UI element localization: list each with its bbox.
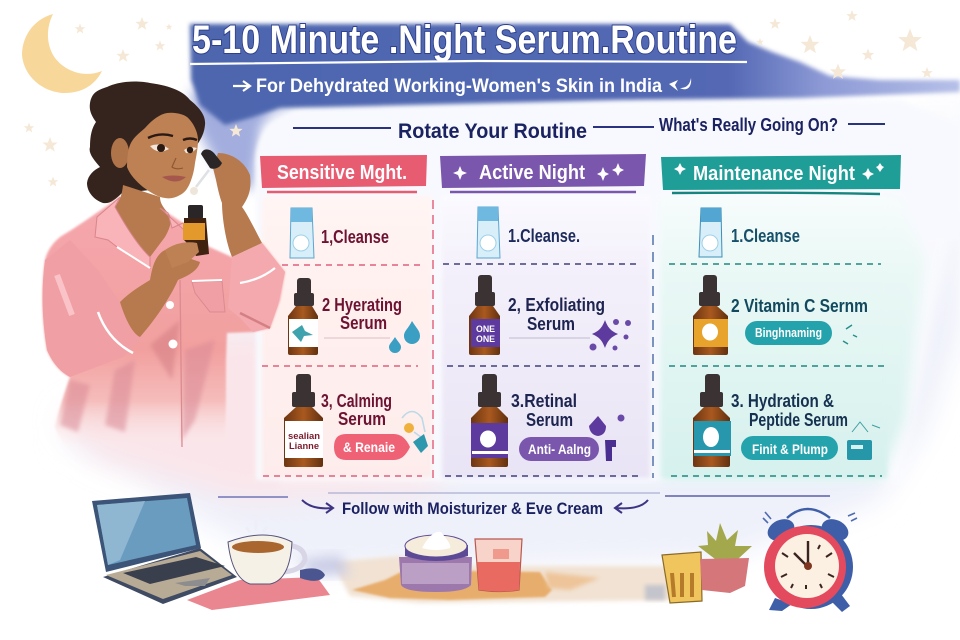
moon [22, 14, 102, 93]
dropper [190, 149, 222, 195]
collar [95, 197, 195, 268]
pocket and buttons [192, 281, 225, 312]
step: hydration and peptide serum [693, 374, 880, 467]
step: hydrating serum: Serum [340, 313, 387, 333]
step: cleanse [699, 208, 800, 257]
sleeve left [43, 240, 143, 377]
heading: rotate your routine: Rotate Your Routine [398, 120, 587, 143]
neck and chest [115, 185, 171, 257]
step: exfoliating serum: ONE [476, 334, 495, 345]
step: retinal serum: Serum [526, 410, 573, 430]
panel: maintenance night [661, 155, 901, 476]
step: calming serum [284, 374, 428, 467]
step: calming serum: & Renaie [343, 440, 395, 455]
forearm and hand left [120, 250, 200, 337]
eyes and mouth [148, 134, 197, 182]
step: calming serum: Lianne [289, 441, 319, 452]
header: active night: Active Night [479, 162, 585, 184]
step: cleanse: 1,Cleanse [321, 226, 389, 247]
background washes [60, 90, 960, 570]
panel: active night [440, 154, 646, 476]
hair [87, 82, 205, 203]
forearm and hand right [213, 153, 262, 257]
step: exfoliating serum: ONE [476, 324, 495, 334]
bottle in hand [183, 205, 209, 256]
step: vitamin c serum: 2 Vitamin C Sernm [731, 296, 868, 316]
step: vitamin c serum: Binghnaming [755, 326, 822, 340]
bottom heading: follow with moisturizer and eye cream: Follow with Moisturizer & Eve Cream [342, 500, 603, 518]
napkin [187, 577, 330, 610]
step: retinal serum: Anti- Aalng [528, 442, 591, 457]
header: sensitive night: Sensitive Mght. [277, 162, 407, 184]
cuff left [98, 312, 133, 353]
person: woman applying serum [43, 82, 285, 447]
tea glass [662, 552, 702, 603]
step: retinal serum: 3.Retinal [511, 391, 577, 411]
step: exfoliating serum: Serum [527, 314, 575, 334]
header: maintenance night: Maintenance Night [693, 163, 855, 185]
red glass [475, 539, 522, 592]
step: cleanse: 1.Cleanse. [508, 225, 580, 246]
step: vitamin c serum [693, 275, 868, 355]
header: active night [440, 154, 646, 192]
step: retinal serum [471, 374, 624, 467]
step: exfoliating serum [469, 275, 631, 355]
laptop [92, 493, 237, 604]
title band [190, 24, 960, 125]
column tints [262, 196, 925, 480]
step: exfoliating serum: 2, Exfoliating [508, 295, 605, 315]
step: hydration and peptide serum: 3. Hydration & [731, 391, 834, 411]
column divider: pink [432, 200, 434, 478]
potted plant [698, 523, 752, 593]
alarm clock [763, 509, 857, 612]
pajama body [43, 197, 285, 447]
face [127, 113, 198, 198]
title: 5-10 Minute .Night Serum.Routine [192, 18, 737, 62]
step: hydration and peptide serum: Finit & Plump [752, 442, 828, 457]
step: calming serum: sealian [288, 431, 320, 442]
step: hydrating serum [288, 278, 420, 355]
ear [111, 138, 129, 168]
header: sensitive night [260, 155, 427, 192]
sleeve right [228, 243, 285, 332]
step: cleanse [477, 207, 580, 258]
coffee cup [228, 520, 325, 584]
fingers over bottle [165, 242, 199, 268]
step: calming serum: Serum [338, 409, 386, 429]
moisturizer jar [399, 532, 472, 592]
step: cleanse: 1.Cleanse [731, 225, 800, 246]
bottom heading: follow with moisturizer and eye cream [218, 493, 830, 518]
header: maintenance night [661, 155, 901, 194]
decorative stars [24, 10, 933, 186]
step: hydrating serum: 2 Hyerating [322, 295, 402, 315]
step: cleanse [290, 208, 389, 258]
heading: what's really going on: What's Really Going On? [659, 115, 838, 135]
column divider: blue [652, 235, 654, 478]
step: calming serum: 3, Calming [321, 391, 392, 411]
pajama fold shading [60, 290, 215, 440]
step: hydration and peptide serum: Peptide Serum [749, 410, 848, 430]
panel: sensitive night [260, 155, 428, 476]
table wash [300, 555, 690, 603]
subtitle: For Dehydrated Working-Women's Skin in India [256, 75, 662, 97]
